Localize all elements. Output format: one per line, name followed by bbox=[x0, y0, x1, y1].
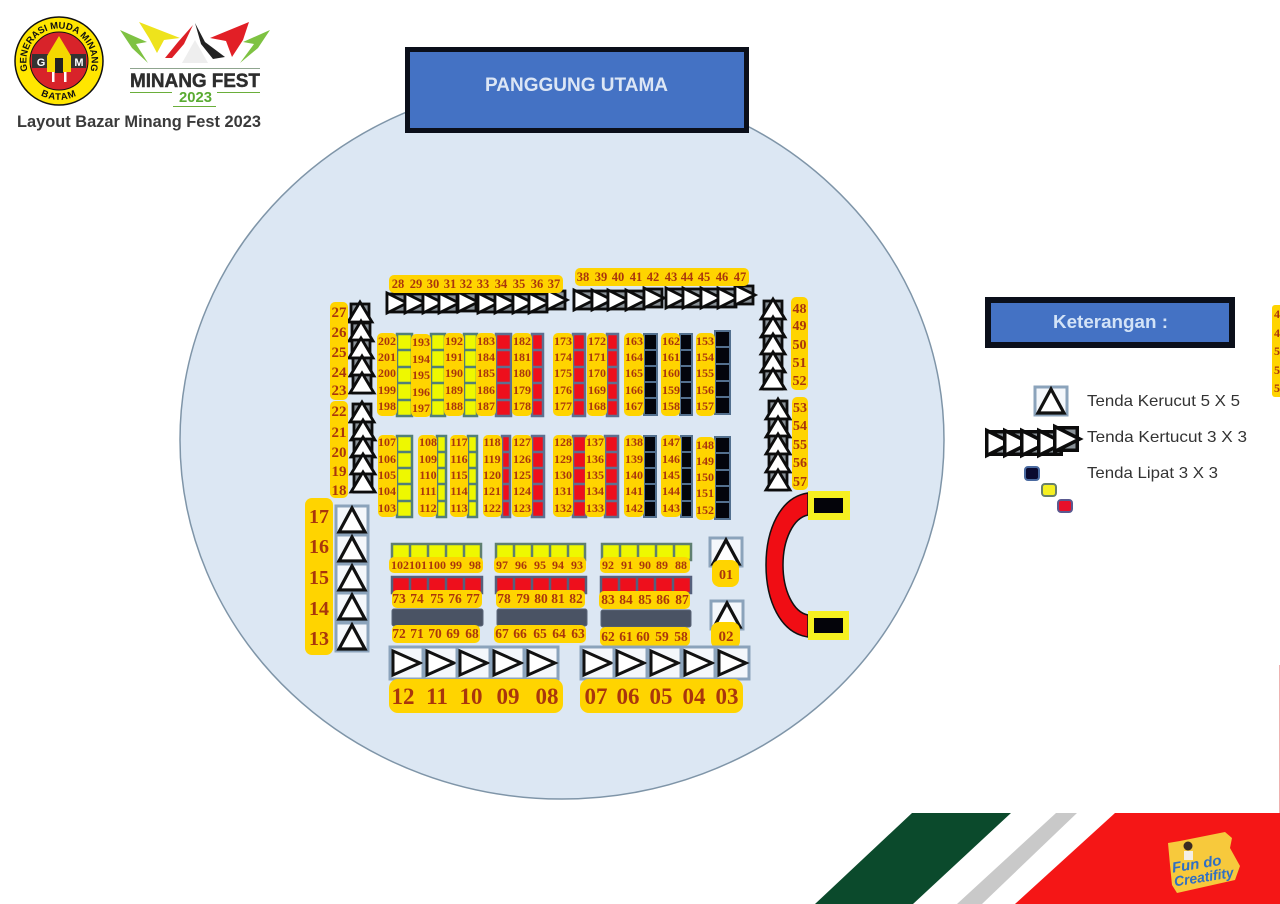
numbers upper columns: 177 bbox=[554, 399, 572, 413]
labels 48-57: 53 bbox=[793, 401, 807, 416]
labels 08-12: 08 bbox=[536, 684, 558, 709]
numbers lower columns: 149 bbox=[696, 454, 714, 468]
legend heading bbox=[988, 300, 1232, 345]
tent 02: 02 bbox=[718, 629, 734, 645]
numbers lower columns: 148 bbox=[696, 438, 714, 452]
labels 13-17: 15 bbox=[309, 567, 329, 589]
numbers lower columns: 114 bbox=[450, 484, 468, 498]
labels 38-47: 40 bbox=[612, 270, 624, 284]
logo: Minang Fest 2023 bbox=[120, 22, 270, 107]
row numbers: 89 bbox=[656, 558, 668, 572]
horizontal booth rows: 67 bbox=[495, 626, 509, 641]
labels 18-27: 24 bbox=[332, 365, 347, 381]
labels 28-37: 29 bbox=[410, 277, 422, 291]
numbers upper columns: 197 bbox=[412, 401, 430, 415]
numbers upper columns: 186 bbox=[477, 383, 495, 397]
numbers upper columns: 192 bbox=[445, 334, 463, 348]
labels 48-57: 54 bbox=[793, 419, 807, 434]
edge mark bbox=[1279, 665, 1280, 813]
horizontal booth rows: 64 bbox=[552, 626, 566, 641]
numbers lower columns: 146 bbox=[662, 452, 680, 466]
horizontal booth rows: 66 bbox=[513, 626, 527, 641]
horizontal booth rows: 72 bbox=[392, 626, 406, 641]
row numbers: 90 bbox=[639, 558, 651, 572]
row numbers: 94 bbox=[552, 558, 564, 572]
row numbers bbox=[391, 558, 687, 572]
numbers upper columns: 153 bbox=[696, 334, 714, 348]
legend: 3x3 folding tent bbox=[1025, 465, 1218, 512]
numbers lower columns: 136 bbox=[586, 452, 604, 466]
red booth rows bbox=[392, 577, 691, 593]
row numbers: 95 bbox=[534, 558, 546, 572]
labels 38-47: 43 bbox=[665, 270, 677, 284]
row labels bbox=[389, 557, 690, 646]
numbers upper columns: 199 bbox=[378, 383, 396, 397]
numbers upper columns: 181 bbox=[513, 350, 531, 364]
labels 08-12: 09 bbox=[496, 684, 520, 709]
tents 28-37 bbox=[387, 290, 567, 313]
row numbers: 93 bbox=[571, 558, 583, 572]
numbers upper columns: 183 bbox=[477, 334, 495, 348]
tents 38-47 bbox=[574, 285, 755, 310]
numbers upper columns: 162 bbox=[662, 334, 680, 348]
numbers lower columns: 139 bbox=[625, 452, 643, 466]
numbers upper columns bbox=[378, 334, 714, 415]
labels 28-37: 33 bbox=[477, 277, 489, 291]
logo: Fun do Creatifity: Creatifity bbox=[1173, 864, 1236, 889]
labels 38-47: 38 bbox=[577, 270, 589, 284]
numbers lower columns: 123 bbox=[513, 501, 531, 515]
horizontal booth rows: 82 bbox=[569, 591, 583, 606]
numbers lower columns: 110 bbox=[419, 468, 437, 482]
logo: Fun do Creatifity: Fun do bbox=[1171, 853, 1223, 877]
horizontal booth rows: 62 bbox=[601, 629, 615, 644]
numbers lower columns: 152 bbox=[696, 503, 714, 517]
numbers lower columns: 137 bbox=[586, 435, 604, 449]
horizontal booth rows: 71 bbox=[410, 626, 424, 641]
numbers upper columns: 164 bbox=[625, 350, 643, 364]
labels 13-17: 13 bbox=[309, 628, 329, 650]
venue ground circle bbox=[180, 81, 944, 799]
numbers lower columns: 121 bbox=[483, 484, 501, 498]
numbers upper columns: 163 bbox=[625, 334, 643, 348]
labels 18-27: 18 bbox=[332, 483, 346, 499]
labels 18-27: 26 bbox=[332, 325, 347, 341]
numbers upper columns: 166 bbox=[625, 383, 643, 397]
numbers upper columns: 165 bbox=[625, 366, 643, 380]
numbers lower columns: 134 bbox=[586, 484, 604, 498]
labels 18-27: 23 bbox=[332, 383, 346, 399]
labels 03-07: 05 bbox=[650, 684, 672, 709]
numbers upper columns: 154 bbox=[696, 350, 714, 364]
tents 18-27 bbox=[348, 302, 375, 492]
tent 01 bbox=[710, 538, 742, 587]
logo: Minang Fest 2023: MINANG FEST bbox=[130, 71, 260, 92]
labels 28-37: 28 bbox=[392, 277, 404, 291]
horizontal booth rows: 78 bbox=[497, 591, 511, 606]
horizontal booth rows: 81 bbox=[551, 591, 565, 606]
legend: 3x3 cone tent: Tenda Kertucut 3 X 3 bbox=[1087, 429, 1247, 446]
logo: Generasi Muda Minang: BATAM bbox=[41, 90, 76, 100]
numbers lower columns: 143 bbox=[662, 501, 680, 515]
horizontal booth rows: 61 bbox=[619, 629, 633, 644]
tents 48-57 bbox=[761, 299, 790, 490]
labels 28-37 bbox=[389, 275, 563, 293]
numbers upper columns: 157 bbox=[696, 399, 714, 413]
horizontal booth rows bbox=[389, 544, 691, 646]
entrance booth bottom bbox=[808, 611, 849, 640]
labels 28-37: 30 bbox=[427, 277, 439, 291]
labels 03-07: 04 bbox=[682, 684, 706, 709]
numbers lower columns: 116 bbox=[450, 452, 468, 466]
black booths upper bbox=[644, 331, 730, 415]
horizontal booth rows: 74 bbox=[410, 591, 424, 606]
large tents 13-17 bbox=[336, 506, 368, 651]
numbers upper columns: 201 bbox=[378, 350, 396, 364]
lower booth block bbox=[378, 435, 730, 520]
numbers lower columns: 124 bbox=[513, 484, 531, 498]
labels 18-27: 22 bbox=[332, 404, 346, 420]
numbers lower columns: 133 bbox=[586, 501, 604, 515]
logo: Minang Fest 2023: 2023 bbox=[179, 89, 212, 106]
numbers lower columns: 151 bbox=[696, 486, 714, 500]
numbers upper columns: 187 bbox=[477, 399, 495, 413]
yellow booth rows bbox=[392, 544, 691, 560]
labels 48-57: 51 bbox=[792, 356, 806, 371]
numbers upper columns: 202 bbox=[378, 334, 396, 348]
logo: Generasi Muda Minang bbox=[14, 16, 104, 106]
labels 48-57: 55 bbox=[793, 438, 807, 453]
numbers lower columns: 111 bbox=[420, 484, 436, 498]
numbers lower columns: 113 bbox=[450, 501, 468, 515]
main stage: PANGGUNG UTAMA bbox=[485, 74, 668, 96]
numbers lower columns: 106 bbox=[378, 452, 396, 466]
numbers upper columns: 191 bbox=[445, 350, 463, 364]
horizontal booth rows: 69 bbox=[446, 626, 460, 641]
labels 18-27: 25 bbox=[332, 345, 346, 361]
row numbers: 91 bbox=[621, 558, 633, 572]
numbers lower columns: 135 bbox=[586, 468, 604, 482]
horizontal booth rows: 63 bbox=[571, 626, 585, 641]
labels 28-37: 32 bbox=[460, 277, 472, 291]
upper booth block bbox=[377, 331, 730, 417]
logos and layout title bbox=[14, 16, 270, 131]
numbers upper columns: 160 bbox=[662, 366, 680, 380]
numbers upper columns: 155 bbox=[696, 366, 714, 380]
labels 48-57: 52 bbox=[792, 374, 806, 389]
numbers upper columns: 182 bbox=[513, 334, 531, 348]
numbers upper columns: 193 bbox=[412, 335, 430, 349]
cropped label strip at right edge bbox=[1272, 305, 1280, 397]
numbers lower columns: 142 bbox=[625, 501, 643, 515]
numbers upper columns: 185 bbox=[477, 366, 495, 380]
legend: 3x3 cone tent bbox=[987, 426, 1247, 456]
labels 38-47: 41 bbox=[630, 270, 642, 284]
labels 13-17: 14 bbox=[309, 598, 329, 620]
numbers upper columns: 195 bbox=[412, 368, 430, 382]
entrance booth top bbox=[808, 491, 850, 520]
row numbers: 97 bbox=[496, 558, 508, 572]
numbers upper columns: 189 bbox=[445, 383, 463, 397]
labels 08-12 bbox=[389, 679, 563, 713]
row numbers: 99 bbox=[450, 558, 462, 572]
labels 03-07: 06 bbox=[616, 684, 640, 709]
dark grey booth rows bbox=[392, 609, 691, 627]
labels 38-47: 46 bbox=[716, 270, 728, 284]
labels 03-07: 03 bbox=[716, 684, 738, 709]
horizontal booth rows: 76 bbox=[448, 591, 462, 606]
labels 48-57: 50 bbox=[792, 338, 806, 353]
labels 13-17: 17 bbox=[309, 506, 329, 528]
numbers lower columns: 130 bbox=[554, 468, 572, 482]
numbers lower columns: 112 bbox=[419, 501, 437, 515]
logo: Generasi Muda Minang: GENERASI MUDA MINANG bbox=[20, 22, 98, 72]
numbers upper columns: 170 bbox=[588, 366, 606, 380]
horizontal booth rows: 80 bbox=[534, 591, 548, 606]
row numbers: 102 bbox=[391, 558, 409, 572]
labels 18-27 bbox=[330, 302, 348, 499]
labels 38-47: 47 bbox=[734, 270, 746, 284]
yellow booths upper bbox=[397, 334, 477, 416]
labels lower columns bbox=[378, 435, 715, 520]
legend: 3x3 folding tent: Tenda Lipat 3 X 3 bbox=[1087, 465, 1218, 482]
numbers lower columns: 127 bbox=[513, 435, 531, 449]
row numbers: 101 bbox=[409, 558, 427, 572]
numbers upper columns: 190 bbox=[445, 366, 463, 380]
labels 28-37: 35 bbox=[513, 277, 525, 291]
labels 38-47: 42 bbox=[647, 270, 659, 284]
numbers lower columns: 105 bbox=[378, 468, 396, 482]
horizontal booth rows: 83 bbox=[601, 592, 615, 607]
labels 48-57: 48 bbox=[792, 302, 806, 317]
numbers lower columns: 131 bbox=[554, 484, 572, 498]
black booths lower bbox=[644, 436, 730, 519]
labels 13-17 bbox=[305, 498, 333, 655]
legend panel bbox=[987, 300, 1247, 512]
numbers lower columns: 145 bbox=[662, 468, 680, 482]
horizontal booth rows: 75 bbox=[430, 591, 444, 606]
numbers lower columns: 119 bbox=[483, 452, 501, 466]
tent 02 bbox=[711, 601, 743, 649]
horizontal booth rows: 60 bbox=[636, 629, 650, 644]
numbers upper columns: 171 bbox=[588, 350, 606, 364]
labels 38-47 bbox=[575, 268, 749, 286]
numbers lower columns: 117 bbox=[450, 435, 468, 449]
row numbers: 98 bbox=[469, 558, 481, 572]
labels 08-12: 10 bbox=[460, 684, 482, 709]
labels 03-07 bbox=[580, 679, 743, 713]
yellow booths lower bbox=[397, 436, 477, 517]
labels 18-27: 21 bbox=[332, 425, 346, 441]
numbers upper columns: 175 bbox=[554, 366, 572, 380]
horizontal booth rows: 77 bbox=[466, 591, 480, 606]
numbers upper columns: 184 bbox=[477, 350, 495, 364]
numbers lower columns: 140 bbox=[625, 468, 643, 482]
labels 38-47: 45 bbox=[698, 270, 710, 284]
numbers lower columns: 128 bbox=[554, 435, 572, 449]
numbers lower columns: 126 bbox=[513, 452, 531, 466]
labels 38-47: 39 bbox=[595, 270, 607, 284]
horizontal booth rows: 70 bbox=[428, 626, 442, 641]
numbers upper columns: 172 bbox=[588, 334, 606, 348]
legend heading: Keterangan : bbox=[1053, 312, 1168, 332]
numbers upper columns: 188 bbox=[445, 399, 463, 413]
numbers lower columns: 132 bbox=[554, 501, 572, 515]
numbers lower columns: 147 bbox=[662, 435, 680, 449]
numbers upper columns: 158 bbox=[662, 399, 680, 413]
numbers lower columns: 144 bbox=[662, 484, 680, 498]
numbers lower columns: 108 bbox=[419, 435, 437, 449]
labels upper columns bbox=[377, 333, 715, 417]
numbers upper columns: 194 bbox=[412, 352, 430, 366]
labels 28-37: 34 bbox=[495, 277, 508, 291]
labels 38-47: 44 bbox=[681, 270, 694, 284]
row numbers: 100 bbox=[428, 558, 446, 572]
labels 08-12: 11 bbox=[426, 684, 448, 709]
numbers lower columns: 138 bbox=[625, 435, 643, 449]
numbers upper columns: 200 bbox=[378, 366, 396, 380]
numbers upper columns: 159 bbox=[662, 383, 680, 397]
labels 28-37: 37 bbox=[548, 277, 560, 291]
numbers lower columns: 104 bbox=[378, 484, 396, 498]
labels 48-57 bbox=[791, 297, 808, 490]
horizontal booth rows: 84 bbox=[619, 592, 633, 607]
labels 03-07: 07 bbox=[584, 684, 608, 709]
labels 18-27: 19 bbox=[332, 464, 346, 480]
row numbers: 88 bbox=[675, 558, 687, 572]
numbers upper columns: 168 bbox=[588, 399, 606, 413]
red booths lower bbox=[502, 436, 618, 517]
numbers lower columns bbox=[378, 435, 714, 517]
labels 28-37: 36 bbox=[531, 277, 543, 291]
horizontal booth rows: 58 bbox=[674, 629, 688, 644]
labels 48-57: 57 bbox=[793, 475, 807, 490]
tent 01: 01 bbox=[719, 568, 733, 583]
horizontal booth rows: 65 bbox=[533, 626, 547, 641]
horizontal booth rows: 87 bbox=[675, 592, 689, 607]
numbers upper columns: 173 bbox=[554, 334, 572, 348]
large tents 03-07 bbox=[581, 647, 749, 679]
numbers lower columns: 107 bbox=[378, 435, 396, 449]
legend: 5x5 cone tent: Tenda Kerucut 5 X 5 bbox=[1087, 393, 1240, 410]
labels 13-17: 16 bbox=[309, 536, 329, 558]
logo: Fun do Creatifity bbox=[1168, 832, 1240, 893]
numbers lower columns: 141 bbox=[625, 484, 643, 498]
row numbers: 92 bbox=[602, 558, 614, 572]
horizontal booth rows: 68 bbox=[465, 626, 479, 641]
labels 08-12: 12 bbox=[392, 684, 414, 709]
numbers upper columns: 178 bbox=[513, 399, 531, 413]
labels 48-57: 49 bbox=[792, 319, 806, 334]
large tents 08-12 bbox=[390, 647, 558, 679]
numbers lower columns: 122 bbox=[483, 501, 501, 515]
numbers lower columns: 109 bbox=[419, 452, 437, 466]
numbers lower columns: 150 bbox=[696, 470, 714, 484]
labels 28-37: 31 bbox=[444, 277, 456, 291]
numbers upper columns: 198 bbox=[378, 399, 396, 413]
numbers upper columns: 167 bbox=[625, 399, 643, 413]
numbers upper columns: 161 bbox=[662, 350, 680, 364]
numbers lower columns: 129 bbox=[554, 452, 572, 466]
horizontal booth rows: 73 bbox=[392, 591, 406, 606]
numbers upper columns: 174 bbox=[554, 350, 572, 364]
labels 48-57: 56 bbox=[793, 456, 807, 471]
numbers upper columns: 169 bbox=[588, 383, 606, 397]
red booths upper bbox=[496, 334, 618, 416]
numbers upper columns: 179 bbox=[513, 383, 531, 397]
legend: 5x5 cone tent bbox=[1035, 387, 1240, 415]
numbers upper columns: 196 bbox=[412, 385, 430, 399]
labels 18-27: 27 bbox=[332, 305, 347, 321]
logo: Generasi Muda Minang: M bbox=[74, 57, 84, 69]
numbers lower columns: 125 bbox=[513, 468, 531, 482]
logo: Generasi Muda Minang: G bbox=[37, 57, 45, 69]
numbers upper columns: 180 bbox=[513, 366, 531, 380]
horizontal booth rows: 85 bbox=[638, 592, 652, 607]
layout title: Layout Bazar Minang Fest 2023 bbox=[17, 113, 261, 131]
horizontal booth rows: 59 bbox=[655, 629, 669, 644]
labels 18-27: 20 bbox=[332, 445, 346, 461]
horizontal booth rows: 79 bbox=[516, 591, 530, 606]
numbers lower columns: 103 bbox=[378, 501, 396, 515]
main stage bbox=[408, 50, 746, 130]
numbers lower columns: 118 bbox=[483, 435, 501, 449]
footer stripes bbox=[815, 813, 1280, 904]
numbers upper columns: 156 bbox=[696, 383, 714, 397]
horizontal booth rows: 86 bbox=[656, 592, 670, 607]
red curved entrance structure bbox=[766, 493, 808, 637]
numbers upper columns: 176 bbox=[554, 383, 572, 397]
numbers lower columns: 115 bbox=[450, 468, 468, 482]
row numbers: 96 bbox=[515, 558, 527, 572]
numbers lower columns: 120 bbox=[483, 468, 501, 482]
